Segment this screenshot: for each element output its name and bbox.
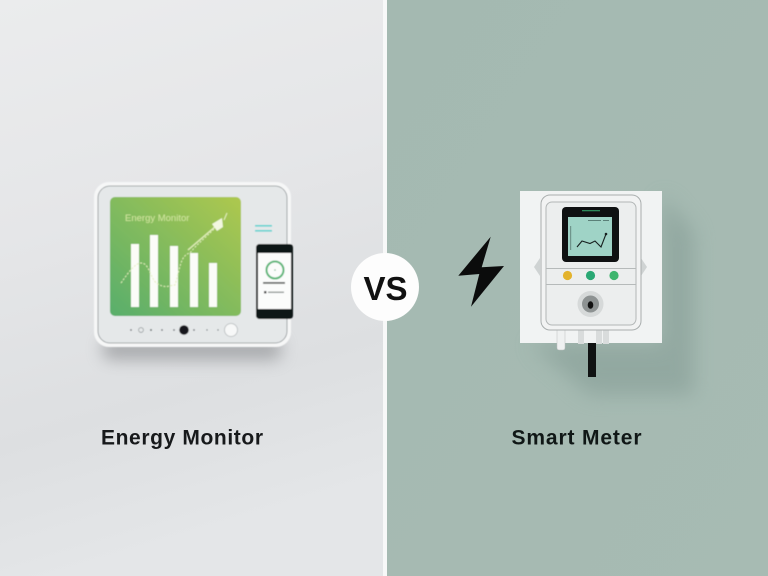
device shadow: [102, 338, 282, 360]
heading: energy monitor: Energy Monitor: [101, 426, 263, 450]
screen title: Energy Monitor: [125, 213, 189, 224]
meter screen: [562, 207, 619, 262]
heading: smart meter: Smart Meter: [512, 426, 642, 450]
keyhole: [578, 291, 604, 317]
indicator lines: [255, 225, 272, 232]
bar chart: [131, 235, 217, 307]
panel: smart meter background: [387, 0, 768, 576]
panel: energy monitor background: [0, 0, 384, 576]
mounting plate: [520, 191, 662, 343]
divider lines: [546, 268, 636, 285]
control buttons: [130, 324, 238, 336]
icon: smart meter device: [520, 191, 694, 395]
line chart: [577, 234, 606, 247]
center divider: [383, 0, 387, 576]
icon: vs badge: [351, 253, 419, 321]
icon: energy monitor device: [94, 182, 293, 347]
trend line: [121, 213, 227, 287]
phone gauge: [266, 262, 284, 278]
indicator lights: [563, 271, 619, 280]
meter body: [541, 195, 641, 330]
vs label: VS: [363, 270, 408, 307]
side clips: [534, 258, 647, 276]
chart screen: [110, 197, 241, 316]
cables: [557, 326, 609, 377]
phone: [256, 244, 293, 319]
icon: lightning bolt: [458, 237, 504, 307]
